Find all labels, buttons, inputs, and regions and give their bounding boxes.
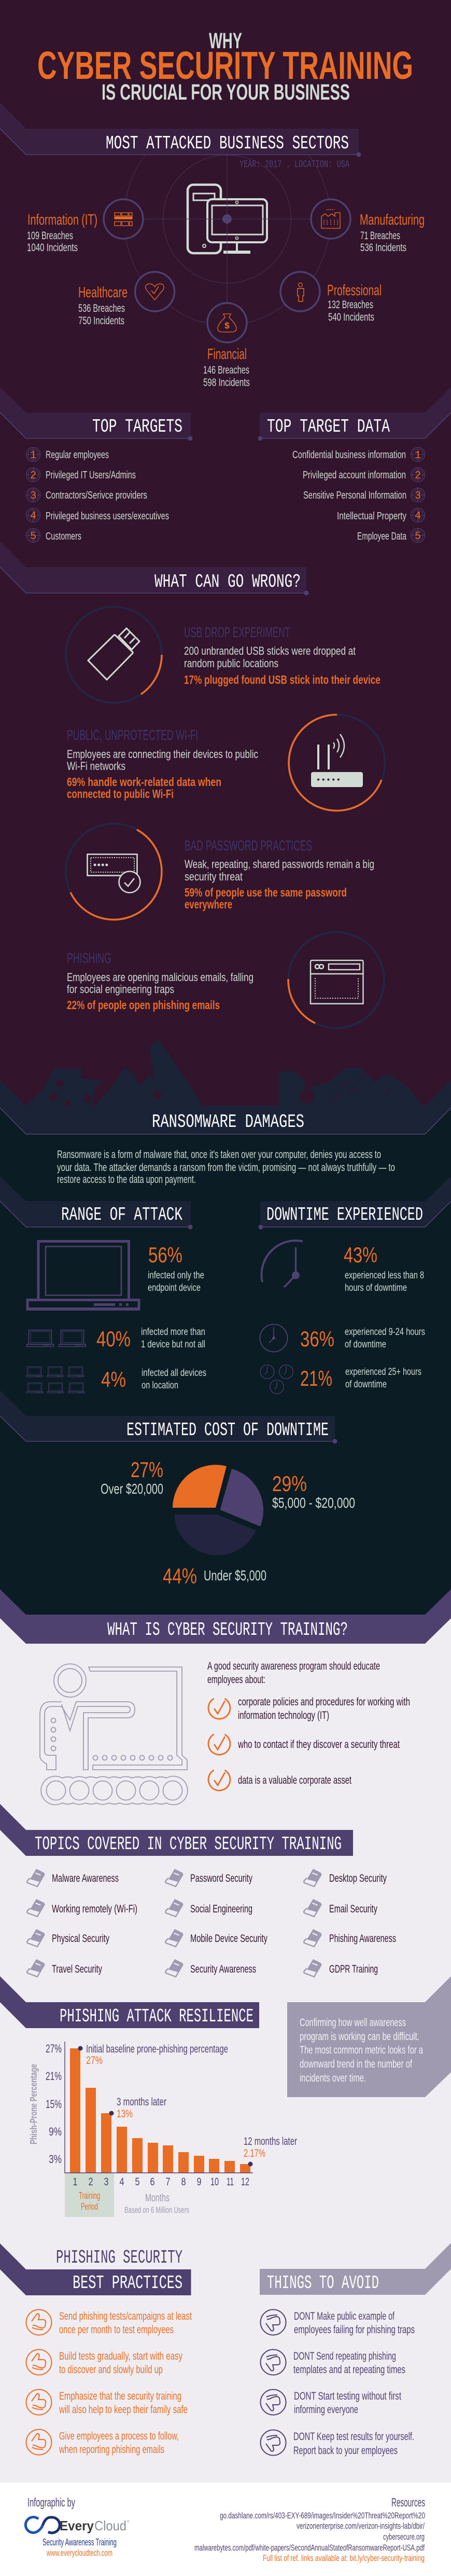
panel: range of attack xyxy=(0,1176,206,1393)
panel: bad password practices: 59% of people use the same password xyxy=(185,886,347,899)
heading: phishing security best practices: BEST PRACTICES xyxy=(73,2272,182,2294)
panel: USB drop experiment: random public locations xyxy=(184,657,278,670)
list: best practices: Send phishing tests/campaigns at least xyxy=(59,2310,192,2322)
axes xyxy=(65,2042,253,2173)
text block: training goals: A good security awareness program should educate xyxy=(207,1660,380,1672)
list: target ranks: Customers xyxy=(46,531,81,542)
panel: range of attack: infected only the xyxy=(148,1270,204,1281)
text block: training goals: data is a valuable corporate asset xyxy=(238,1774,351,1786)
logo: EveryCloud: ® xyxy=(127,2520,130,2524)
topics grid: Mobile Device Security xyxy=(190,1933,267,1945)
y axis labels: 9% xyxy=(49,2125,62,2138)
bar chart: phish-prone percentage xyxy=(29,2042,297,2217)
heading: what can go wrong: WHAT CAN GO WRONG? xyxy=(154,571,301,593)
panel: downtime experienced: 43% xyxy=(344,1243,377,1267)
panel: range of attack: 4% xyxy=(101,1367,126,1392)
panel: range of attack: endpoint device xyxy=(148,1283,201,1293)
list: target ranks: 4 xyxy=(30,511,36,522)
heading: what can go wrong xyxy=(0,541,309,596)
footer: resources: cybersecure.org xyxy=(383,2532,425,2542)
footer: infographic by xyxy=(25,2496,130,2558)
list: best practices: will also help to keep their family safe xyxy=(59,2404,188,2416)
node: information (IT): Information (IT) xyxy=(27,212,97,228)
list: target data ranks: 3 xyxy=(415,490,421,502)
list: target data ranks xyxy=(292,447,425,543)
panel: USB drop experiment: 200 unbranded USB sticks were dropped at xyxy=(184,644,356,657)
topics grid: Security Awareness xyxy=(190,1963,256,1975)
icon: six laptops xyxy=(26,1367,84,1393)
month numbers: 8 xyxy=(181,2176,186,2188)
icon: two laptops xyxy=(27,1330,86,1347)
node: healthcare: Healthcare xyxy=(78,284,128,301)
annotations: 13% xyxy=(117,2108,133,2120)
panel: public unprotected wi-fi: Wi-Fi networks xyxy=(67,760,125,773)
heading: estimated cost of downtime xyxy=(0,1390,337,1443)
list: target data ranks: 5 xyxy=(415,531,421,543)
panel: downtime experienced: experienced 9-24 hours xyxy=(345,1327,425,1338)
month numbers xyxy=(73,2176,249,2188)
panel: USB drop experiment: 17% plugged found USB stick into their device xyxy=(184,673,380,686)
logo: EveryCloud: Every xyxy=(60,2518,94,2533)
label: under 5000: Under $5,000 xyxy=(204,1567,266,1583)
list: target ranks: Privileged business users/executives xyxy=(46,511,169,522)
x axis title: Based on 6 Million Users xyxy=(124,2205,189,2215)
footer: resources xyxy=(194,2496,425,2563)
panel: range of attack: 40% xyxy=(96,1327,131,1351)
x axis title: Months xyxy=(145,2192,170,2204)
text block: training goals: employees about: xyxy=(207,1674,265,1686)
training period label: Period xyxy=(81,2201,98,2212)
panel: range of attack: infected more than xyxy=(141,1327,205,1338)
list: best practices: Emphasize that the security training xyxy=(59,2390,181,2402)
panel: public unprotected wi-fi xyxy=(67,714,385,810)
list: things to avoid: informing everyone xyxy=(294,2404,358,2416)
panel: downtime experienced: of downtime xyxy=(345,1339,386,1350)
node: manufacturing: 536 Incidents xyxy=(360,242,406,254)
panel: downtime experienced: experienced less than 8 xyxy=(345,1270,424,1281)
x axis title xyxy=(124,2192,189,2215)
ring: 59 percent xyxy=(66,824,162,920)
topics grid: Password Security xyxy=(190,1872,252,1884)
month numbers: 6 xyxy=(150,2176,154,2188)
icon: wi-fi router xyxy=(311,734,363,787)
training period band xyxy=(65,2173,114,2217)
heading: top targets: TOP TARGETS xyxy=(92,416,182,437)
icon: USB stick xyxy=(88,628,139,680)
panel: phishing xyxy=(67,932,384,1028)
month numbers: 7 xyxy=(166,2176,170,2188)
skyline of broken data: 100 xyxy=(338,1078,352,1091)
text block: training goals xyxy=(204,1660,410,1795)
icon: large laptop xyxy=(26,1241,140,1311)
annotations: 3 months later xyxy=(117,2096,166,2108)
text block: training goals: information technology (IT) xyxy=(238,1710,329,1721)
skyline of broken data xyxy=(0,1040,451,1106)
node: financial xyxy=(203,303,250,389)
heading: things to avoid: THINGS TO AVOID xyxy=(267,2272,379,2294)
topics grid: Desktop Security xyxy=(329,1872,387,1884)
training period label: Training xyxy=(79,2191,100,2201)
panel: bad password practices: security threat xyxy=(185,870,243,883)
panel: phishing: Employees are opening malicious emails, falling xyxy=(67,971,253,984)
list: target ranks: Contractors/Serivce providers xyxy=(46,490,147,501)
heading: ransomware damages: RANSOMWARE DAMAGES xyxy=(152,1111,304,1133)
list: target data ranks: 1 xyxy=(415,450,421,462)
panel: phishing: for social engineering traps xyxy=(67,983,174,996)
footer: infographic by: Infographic by xyxy=(27,2496,75,2509)
list: things to avoid: Report back to your employees xyxy=(293,2445,398,2457)
panel: downtime experienced: hours of downtime xyxy=(345,1283,407,1293)
annotations xyxy=(86,2043,297,2159)
list: target data ranks: Employee Data xyxy=(357,531,407,542)
month numbers: 11 xyxy=(227,2176,234,2188)
y axis labels: 27% xyxy=(46,2042,62,2055)
topics grid: Malware Awareness xyxy=(52,1872,119,1884)
node: manufacturing xyxy=(311,199,425,254)
month numbers: 10 xyxy=(210,2176,219,2188)
skyline of broken data: 001 xyxy=(346,1084,360,1097)
list: best practices: Build tests gradually, start with easy xyxy=(59,2350,182,2362)
node: financial: 146 Breaches xyxy=(203,364,249,376)
list: target ranks: 5 xyxy=(30,531,36,543)
node: professional: Professional xyxy=(327,282,382,299)
icon: three clocks xyxy=(260,1365,293,1394)
label: 5000 to 20000 xyxy=(272,1471,355,1511)
list: target ranks: 3 xyxy=(30,490,36,502)
panel: USB drop experiment: USB DROP EXPERIMENT xyxy=(184,624,290,640)
list: target ranks: 1 xyxy=(30,450,36,462)
heading: ransomware damages xyxy=(0,1080,451,1134)
list: target data ranks: Confidential business information xyxy=(292,449,406,461)
label: over 20000: Over $20,000 xyxy=(101,1481,163,1497)
title xyxy=(37,29,413,105)
panel: public unprotected wi-fi: Employees are connecting their devices to public xyxy=(67,748,258,761)
heading: estimated cost of downtime: ESTIMATED COST OF DOWNTIME xyxy=(126,1420,329,1441)
training period label xyxy=(79,2191,100,2212)
heading: topics covered xyxy=(0,1804,353,1856)
panel: phishing: 22% of people open phishing emails xyxy=(67,998,220,1012)
topics grid: Working remotely (Wi-Fi) xyxy=(52,1903,137,1915)
label: 5000 to 20000: 29% xyxy=(272,1471,307,1496)
heading: top target data xyxy=(258,387,451,441)
panel: range of attack: 56% xyxy=(148,1243,182,1267)
node: information (IT): 109 Breaches xyxy=(27,230,73,242)
node: financial: 598 Incidents xyxy=(203,377,250,389)
topics grid: Travel Security xyxy=(52,1963,102,1975)
node: healthcare: 750 Incidents xyxy=(78,315,124,327)
list: target data ranks: 4 xyxy=(415,511,421,522)
node: professional xyxy=(280,272,382,323)
heading: top target data: TOP TARGET DATA xyxy=(267,416,390,437)
label: under 5000 xyxy=(163,1564,266,1588)
skyline of broken data: 101 xyxy=(355,1071,368,1083)
node: professional: 540 Incidents xyxy=(328,311,374,323)
heading: range of attack: RANGE OF ATTACK xyxy=(61,1204,182,1225)
heading: what is cyber security training xyxy=(0,1589,451,1644)
panel: bad password practices: Weak, repeating, shared passwords remain a big xyxy=(185,858,374,871)
node: financial: $ xyxy=(224,321,230,330)
sector diagram xyxy=(27,155,425,389)
annotations: 12 months later xyxy=(244,2136,297,2147)
list: target data ranks: 2 xyxy=(415,470,421,482)
heading: downtime experienced xyxy=(258,1176,451,1230)
callout: measuring awareness xyxy=(287,1976,451,2097)
node: healthcare xyxy=(78,272,174,327)
list: best practices: when reporting phishing emails xyxy=(59,2444,164,2456)
bars xyxy=(70,2048,250,2173)
list: target data ranks: Privileged account information xyxy=(303,470,406,481)
label: 5000 to 20000: $5,000 - $20,000 xyxy=(272,1495,355,1511)
node: financial: Financial xyxy=(207,346,247,363)
node: professional: 132 Breaches xyxy=(328,299,373,311)
skyline of broken data: 10 xyxy=(382,1085,393,1096)
heading: phishing security best practices xyxy=(0,2243,191,2295)
panel: downtime experienced: of downtime xyxy=(345,1379,387,1390)
panel: top target data xyxy=(258,387,451,543)
list: things to avoid: DONT Send repeating phishing xyxy=(293,2350,396,2362)
panel: range of attack: infected all devices xyxy=(142,1368,206,1379)
list: target ranks: Privileged IT Users/Admins xyxy=(46,470,136,481)
panel: range of attack: 1 device but not all xyxy=(141,1339,205,1350)
connecting lines xyxy=(126,155,329,323)
y axis labels: 3% xyxy=(49,2153,62,2166)
panel: top targets xyxy=(0,387,193,543)
icon: browser window xyxy=(311,960,363,1003)
panel: USB drop experiment xyxy=(66,607,380,702)
list: target ranks: 2 xyxy=(30,470,36,482)
panel: public unprotected wi-fi: connected to public Wi-Fi xyxy=(67,787,174,801)
label: over 20000 xyxy=(101,1457,163,1497)
callout: measuring awareness: incidents over time. xyxy=(300,2072,366,2084)
panel: range of attack: on location xyxy=(142,1380,178,1391)
list: best practices: to discover and slowly build up xyxy=(59,2364,163,2376)
month numbers: 2 xyxy=(88,2176,93,2188)
label: under 5000: 44% xyxy=(163,1564,197,1588)
title: WHY xyxy=(209,29,242,53)
list: target ranks: Regular employees xyxy=(46,449,109,461)
node: healthcare: 536 Breaches xyxy=(78,302,125,314)
panel: bad password practices: BAD PASSWORD PRACTICES xyxy=(185,837,312,853)
y axis title: Phish-Prone Percentage xyxy=(29,2064,39,2144)
list: best practices xyxy=(26,2310,192,2456)
node: manufacturing: 71 Breaches xyxy=(360,230,400,242)
topics grid: Social Engineering xyxy=(190,1903,252,1915)
list: things to avoid: templates and at repeating times xyxy=(293,2364,405,2376)
footer: infographic by: Security Awareness Training xyxy=(43,2537,117,2547)
heading: phishing attack resilience: PHISHING ATTACK RESILIENCE xyxy=(60,2006,253,2027)
topics grid: Phishing Awareness xyxy=(329,1933,396,1945)
list: target data ranks: Sensitive Personal Information xyxy=(303,490,406,501)
callout: measuring awareness: Confirming how well awareness xyxy=(300,2017,406,2029)
heading: phishing security best practices: PHISHING SECURITY xyxy=(56,2247,182,2268)
month numbers: 12 xyxy=(241,2176,249,2188)
panel: downtime experienced: 21% xyxy=(300,1366,332,1390)
ransomware description: restore access to the data upon payment. xyxy=(57,1174,196,1186)
list: target ranks xyxy=(26,447,169,543)
month numbers: 4 xyxy=(119,2176,124,2188)
skyline of broken data: 100 xyxy=(328,1091,342,1104)
month numbers: 3 xyxy=(104,2176,109,2188)
pie chart: cost of downtime xyxy=(101,1457,355,1588)
icon: large clock xyxy=(262,1241,303,1287)
panel: public unprotected wi-fi: PUBLIC, UNPROTECTED WI-FI xyxy=(67,727,198,743)
panel: bad password practices xyxy=(66,824,374,920)
list: best practices: once per month to test employees xyxy=(59,2324,174,2336)
y axis labels: 15% xyxy=(46,2098,62,2111)
list: things to avoid xyxy=(260,2310,415,2457)
list: best practices: Give employees a process to follow, xyxy=(59,2430,179,2442)
heading: top targets xyxy=(0,387,193,441)
y axis labels: 21% xyxy=(46,2070,62,2083)
heading: range of attack xyxy=(0,1176,193,1230)
icon: presenter at board xyxy=(40,1664,188,1805)
month numbers: 9 xyxy=(197,2176,201,2188)
list: things to avoid: DONT Start testing without first xyxy=(294,2390,401,2402)
logo: EveryCloud: Cloud xyxy=(94,2518,126,2533)
panel: bad password practices: everywhere xyxy=(185,898,232,911)
heading: most attacked business sectors xyxy=(0,103,361,157)
topics grid: Email Security xyxy=(329,1903,377,1915)
topics grid xyxy=(27,1869,396,1977)
heading: most attacked business sectors: MOST ATTACKED BUSINESS SECTORS xyxy=(106,133,349,154)
icon: phone and monitor xyxy=(188,185,267,254)
month numbers: 5 xyxy=(135,2176,140,2188)
heading: things to avoid xyxy=(260,2243,451,2295)
marker dots xyxy=(78,2046,253,2167)
panel: downtime experienced: 36% xyxy=(300,1327,334,1351)
icon: password box xyxy=(87,854,140,892)
ring: 69 percent xyxy=(289,714,385,810)
panel: downtime experienced: experienced 25+ hours xyxy=(345,1367,421,1377)
topics grid: GDPR Training xyxy=(329,1963,378,1975)
y axis labels xyxy=(46,2042,62,2166)
panel: downtime experienced xyxy=(258,1176,451,1394)
node: information (IT) xyxy=(27,199,143,254)
panel: phishing: PHISHING xyxy=(67,950,111,966)
ransomware description xyxy=(57,1149,395,1186)
annotations: 2.17% xyxy=(244,2147,265,2159)
list: things to avoid: DONT Make public example of xyxy=(294,2310,394,2322)
annotations: 27% xyxy=(86,2055,103,2067)
heading: phishing attack resilience xyxy=(0,1976,259,2028)
panel: public unprotected wi-fi: 69% handle work-related data when xyxy=(67,775,221,789)
icon: clock xyxy=(260,1324,287,1352)
topics grid: Physical Security xyxy=(52,1933,109,1945)
ring: 17 percent xyxy=(66,607,162,702)
list: target data ranks: Intellectual Property xyxy=(337,511,406,522)
year and location: YEAR: 2017 . LOCATION: USA xyxy=(239,159,349,170)
footer: resources: Resources xyxy=(391,2496,425,2509)
footer: infographic by: www.everycloudtech.com xyxy=(46,2548,112,2558)
month numbers: 1 xyxy=(73,2176,78,2188)
label: over 20000: 27% xyxy=(131,1457,163,1482)
ring: 22 percent xyxy=(288,932,384,1028)
node: information (IT): 1040 Incidents xyxy=(27,242,78,254)
logo: EveryCloud xyxy=(25,2517,130,2533)
annotations: Initial baseline prone-phishing percentage xyxy=(86,2043,228,2055)
